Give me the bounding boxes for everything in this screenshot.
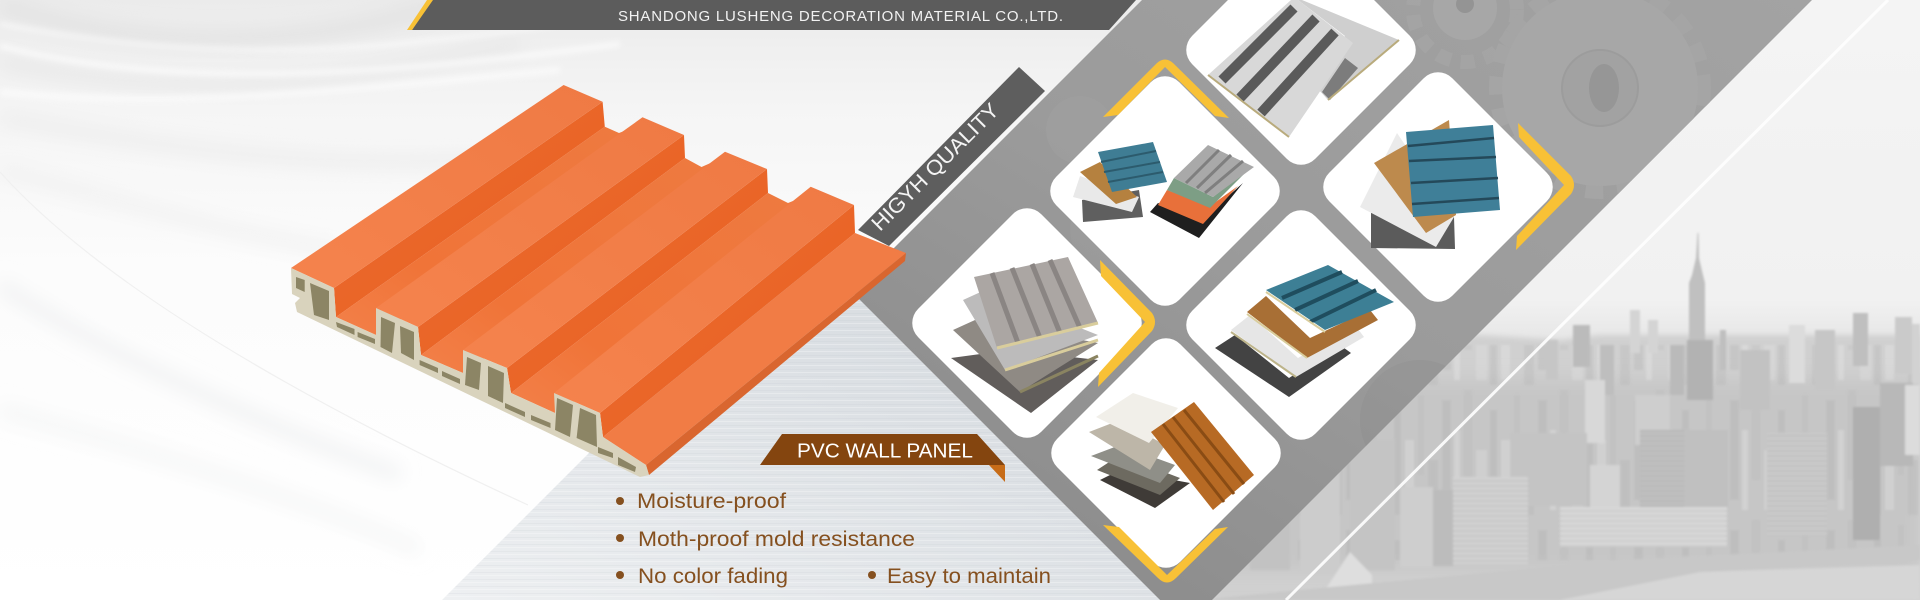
orange PVC wall panel bbox=[291, 85, 906, 477]
ribbon text: HIGYH QUALITY bbox=[867, 99, 1004, 236]
panel fan bbox=[1360, 120, 1500, 249]
product diamond 6: white stack and wood panel bbox=[1043, 330, 1289, 576]
stack bbox=[951, 257, 1098, 413]
yellow bracket: bottom of diamond 6 bbox=[1103, 525, 1228, 582]
stack and wood board bbox=[1089, 393, 1254, 510]
feature list bbox=[616, 489, 1051, 588]
rib 2 bbox=[376, 117, 685, 355]
feature: no color fading: No color fading bbox=[638, 564, 788, 588]
yellow bracket: right of diamond 3 bbox=[1516, 123, 1574, 250]
flange top bbox=[603, 233, 906, 465]
product diamond 5: layered colour panels bbox=[1178, 202, 1424, 448]
rib 3 bbox=[463, 152, 768, 393]
product diamond 3: teal over wood bbox=[1315, 64, 1561, 310]
channel floors bbox=[336, 125, 808, 413]
rib 1 bbox=[291, 85, 605, 317]
product diamond 4: grey wood stack bbox=[904, 200, 1150, 446]
layered panels bbox=[1215, 265, 1394, 397]
background: diagonal white line bbox=[1286, 0, 1888, 600]
grey diagonal band bbox=[851, 0, 1812, 600]
feature: easy to maintain: Easy to maintain bbox=[887, 564, 1051, 588]
cream profile end bbox=[291, 268, 649, 477]
panel render bbox=[1208, 0, 1399, 137]
profile cavities bbox=[296, 277, 636, 472]
background: grey city skyline bbox=[1180, 0, 1920, 600]
heading ribbon: PVC wall panel bbox=[760, 434, 1005, 482]
left stack bbox=[1073, 142, 1167, 222]
flange edge bbox=[646, 253, 906, 475]
product diamond 2: assorted stacks bbox=[1042, 68, 1288, 314]
product diamond 1: grey panel bbox=[1178, 0, 1424, 173]
building: Empire State tower bbox=[1687, 233, 1713, 400]
heading text: PVC WALL PANEL bbox=[797, 440, 973, 462]
gears watermark bbox=[1046, 0, 1704, 480]
right stack bbox=[1150, 145, 1254, 238]
yellow bracket: top of diamond 2 bbox=[1103, 60, 1229, 118]
company name: SHANDONG LUSHENG DECORATION MATERIAL CO.,LTD. bbox=[618, 8, 1063, 25]
ribbon: high quality bbox=[858, 67, 1045, 246]
feature: moth-proof mold resistance: Moth-proof mold resistance bbox=[638, 527, 915, 551]
background: brushed metal panel bbox=[442, 242, 1160, 600]
yellow bracket: right of diamond 4 bbox=[1098, 260, 1155, 387]
yellow accent stripe bbox=[407, 0, 433, 30]
feature: moisture-proof: Moisture-proof bbox=[637, 489, 786, 513]
city buildings bbox=[1190, 233, 1920, 600]
rib 4 bbox=[554, 187, 855, 437]
top bar bbox=[407, 0, 1136, 30]
